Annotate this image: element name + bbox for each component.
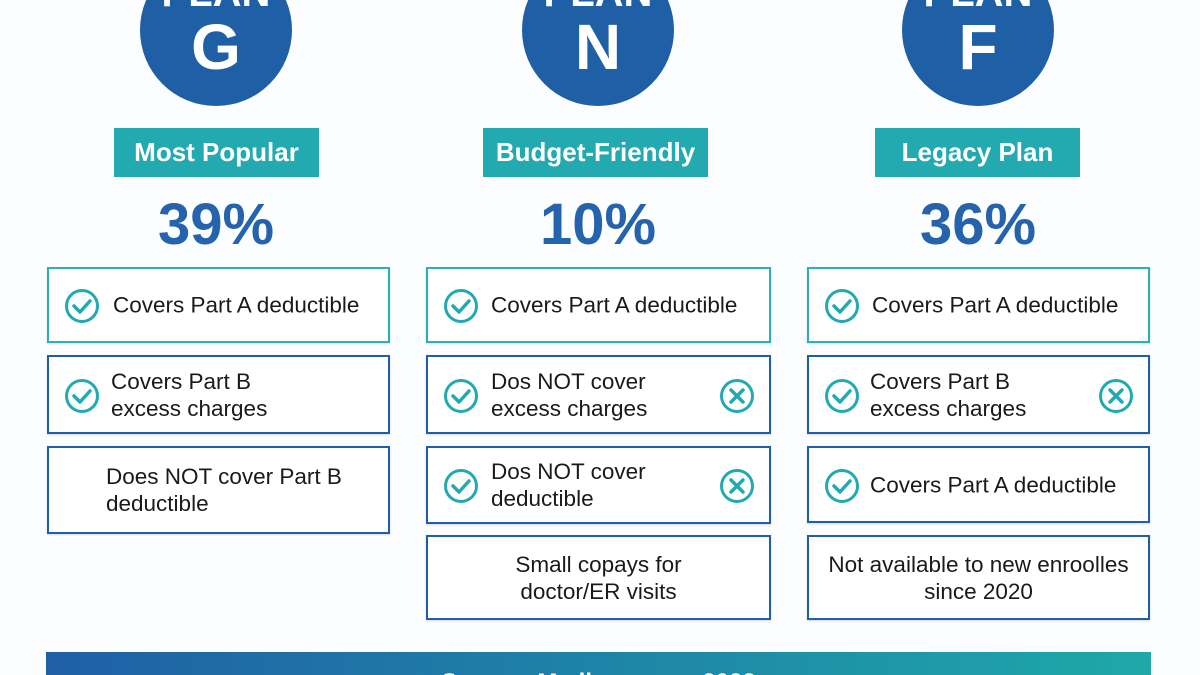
N box 4: Small copays for	[515, 552, 682, 576]
plan F circle: F	[958, 11, 998, 83]
N box 1: Covers Part A deductible	[491, 292, 737, 318]
N box 4: doctor/ER visits	[520, 578, 677, 604]
badge: most popular: Most Popular	[134, 137, 299, 167]
badge: legacy plan	[875, 128, 1080, 177]
N box 2: excess charges	[491, 396, 647, 420]
N box 3	[426, 446, 771, 524]
F box 2: excess charges	[870, 396, 1026, 420]
N box 2: Dos NOT cover	[491, 368, 646, 394]
F box 3: Covers Part A deductible	[870, 472, 1116, 497]
F box 3	[807, 446, 1150, 523]
badge: legacy plan: Legacy Plan	[902, 137, 1053, 167]
column N features	[425, 267, 772, 622]
plan G circle: G	[191, 11, 241, 83]
G box 3	[47, 446, 390, 534]
F box 4: Not available to new enroolles	[828, 552, 1129, 576]
F box 1: Covers Part A deductible	[872, 292, 1118, 318]
column G features	[46, 267, 391, 536]
percent F: 36%	[920, 192, 1036, 257]
G box 2: excess charges	[111, 396, 267, 420]
N box 3: Dos NOT cover	[491, 459, 646, 484]
plan N circle: N	[575, 11, 621, 83]
badge: budget friendly: Budget-Friendly	[496, 137, 695, 167]
F box 4: since 2020	[924, 578, 1033, 604]
footer source bar	[46, 652, 1151, 675]
badge: budget friendly	[483, 128, 708, 177]
column F features	[806, 267, 1151, 622]
plan G circle	[140, 0, 292, 106]
plan F circle	[902, 0, 1054, 106]
F box 4	[807, 535, 1150, 620]
percent N: 10%	[540, 192, 656, 257]
N box 1	[426, 267, 771, 343]
N box 4	[426, 535, 771, 620]
plan N circle	[522, 0, 674, 106]
G box 3: deductible	[106, 491, 209, 516]
G box 2	[47, 355, 390, 434]
G box 3: Does NOT cover Part B	[106, 464, 342, 489]
F box 1	[807, 267, 1150, 343]
G box 1	[47, 267, 390, 343]
F box 2	[807, 355, 1150, 434]
N box 3: deductible	[491, 486, 594, 511]
G box 2: Covers Part B	[111, 368, 251, 394]
badge: most popular	[114, 128, 319, 177]
percent G: 39%	[158, 192, 274, 257]
N box 2	[426, 355, 771, 434]
F box 2: Covers Part B	[870, 368, 1010, 394]
G box 1: Covers Part A deductible	[113, 292, 359, 318]
